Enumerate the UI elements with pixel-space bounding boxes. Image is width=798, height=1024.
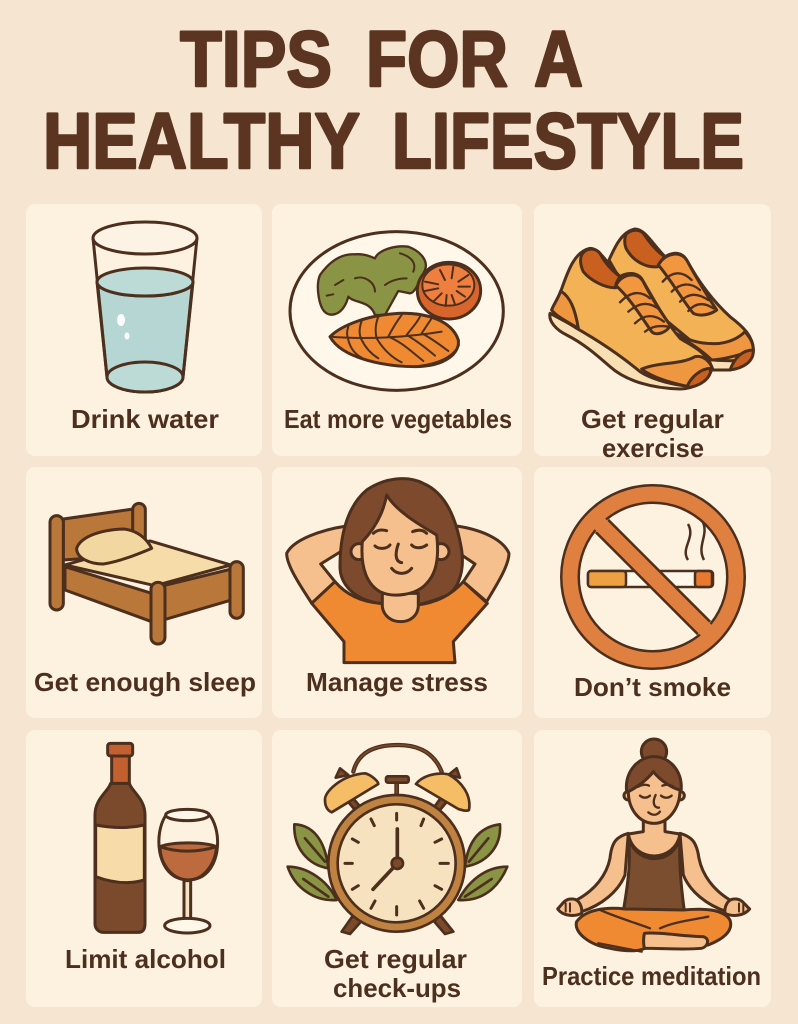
panel: get regular check-ups: check-ups xyxy=(333,973,461,1003)
panel: get regular exercise: exercise xyxy=(602,433,704,463)
title: TIPS xyxy=(180,14,332,103)
panel: manage stress xyxy=(272,467,522,718)
panel: get regular check-ups xyxy=(272,730,522,1007)
panel: drink water xyxy=(26,204,262,456)
icon: bed xyxy=(50,503,243,644)
title: A xyxy=(534,14,583,103)
title xyxy=(43,14,744,185)
label: Drink water xyxy=(71,404,219,434)
label: Practice meditation xyxy=(542,961,761,991)
panel: practice meditation xyxy=(534,730,771,1007)
label: Get enough sleep xyxy=(34,667,256,697)
label: Manage stress xyxy=(306,667,488,697)
label: Get regular xyxy=(324,944,467,974)
icon: meditating woman xyxy=(558,739,750,952)
label: Limit alcohol xyxy=(65,944,226,974)
label: Eat more vegetables xyxy=(284,404,512,434)
label: Don’t smoke xyxy=(574,672,731,702)
panel: eat more vegetables xyxy=(272,204,522,456)
icon: glass of water xyxy=(93,222,197,392)
icon: sneakers xyxy=(550,229,753,389)
panel: get regular exercise xyxy=(534,204,771,463)
panel: get enough sleep xyxy=(26,467,262,718)
panel: don't smoke xyxy=(534,467,771,718)
label: Get regular xyxy=(581,404,724,434)
title: HEALTHY xyxy=(43,96,360,185)
icon: relaxed woman xyxy=(287,479,509,663)
icon: no smoking sign xyxy=(570,494,736,660)
icon: plate of food xyxy=(290,232,503,390)
icon: alarm clock with leaves xyxy=(288,745,507,934)
panel: limit alcohol xyxy=(26,730,262,1007)
icon: wine bottle and glass xyxy=(95,743,218,933)
title: FOR xyxy=(366,14,508,103)
